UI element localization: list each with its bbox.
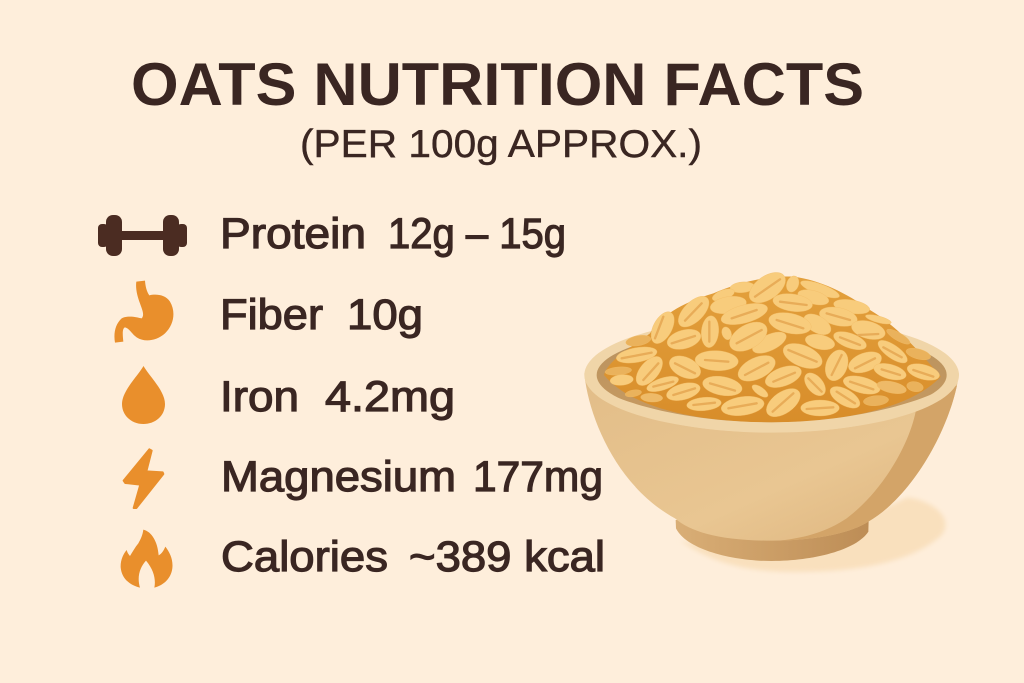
value: magnesium: 177mg [473, 453, 603, 501]
bowl inside [597, 328, 947, 422]
nutrient row: calories [121, 530, 605, 588]
label: calories: Calories [221, 533, 388, 581]
bowl foot [676, 520, 869, 561]
label: fiber: Fiber [220, 291, 323, 339]
icon: lightning bolt [124, 449, 163, 508]
oat flakes [605, 266, 941, 422]
title: OATS NUTRITION FACTS [131, 51, 864, 118]
value: protein: 12g – 15g [388, 210, 566, 258]
value: iron: 4.2mg [325, 373, 455, 421]
subtitle: (PER 100g APPROX.) [300, 123, 702, 166]
bowl rim [584, 318, 959, 432]
bowl shadow [680, 497, 946, 572]
icon: dumbbell [98, 215, 187, 256]
bowl body shadow [782, 386, 957, 540]
icon: flame [121, 530, 173, 588]
nutrient row: magnesium [124, 449, 603, 508]
label: iron: Iron [220, 373, 299, 421]
oat bed [604, 276, 941, 422]
value: fiber: 10g [347, 291, 423, 339]
oat flake grooves [622, 279, 933, 412]
bowl rim front lip [584, 375, 959, 433]
nutrient row: iron [122, 366, 455, 424]
label: protein: Protein [220, 210, 366, 258]
bowl body [584, 373, 959, 541]
nutrient row: fiber [114, 281, 423, 343]
value: calories: ~389 kcal [409, 533, 605, 581]
label: magnesium: Magnesium [221, 453, 456, 501]
icon: stomach [114, 281, 173, 343]
icon: water drop [122, 366, 165, 424]
nutrient row: protein [98, 210, 566, 258]
illustration: bowl of oats [584, 266, 980, 572]
